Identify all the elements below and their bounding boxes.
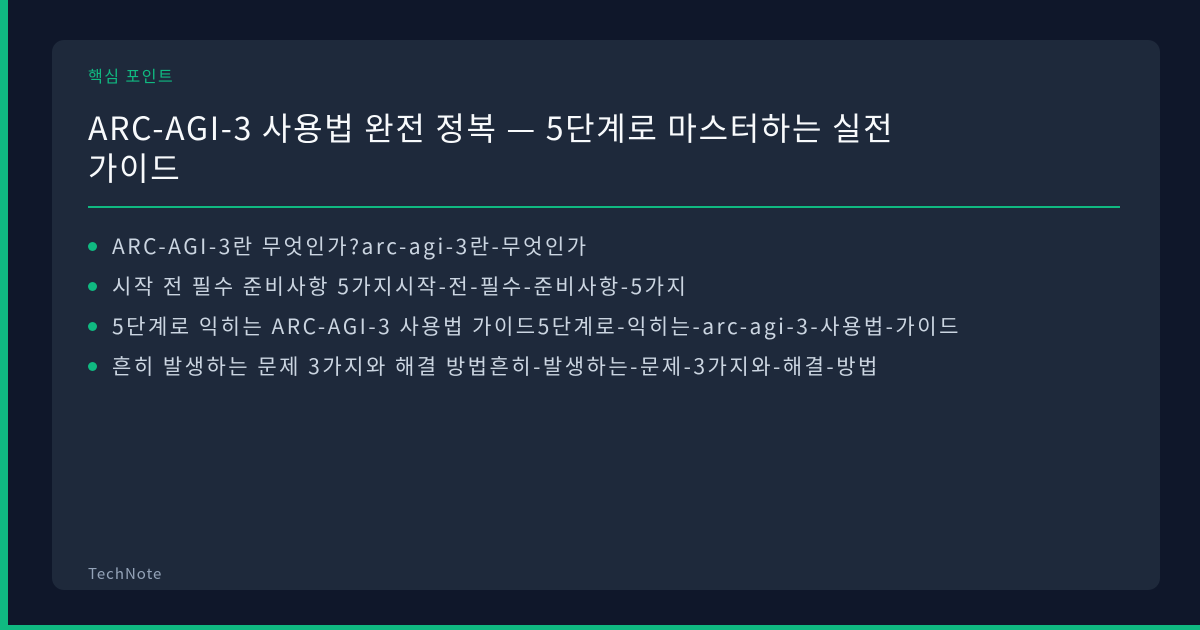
label: key points: 핵심 포인트 bbox=[88, 63, 174, 87]
bullet 1: ARC-AGI-3란 무엇인가?arc-agi-3란-무엇인가 bbox=[112, 231, 589, 261]
bullet 4: 흔히 발생하는 문제 3가지와 해결 방법흔히-발생하는-문제-3가지와-해결-방법 bbox=[112, 351, 880, 381]
bullet 2: 시작 전 필수 준비사항 5가지시작-전-필수-준비사항-5가지 bbox=[112, 271, 688, 301]
footer brand: TechNote bbox=[88, 563, 162, 584]
accent bar left bbox=[0, 0, 8, 630]
bullet list bbox=[88, 231, 961, 381]
accent bar bottom bbox=[0, 625, 1200, 630]
divider bbox=[88, 206, 1120, 208]
title: ARC-AGI-3 사용법 완전 정복 — 5단계로 마스터하는 실전 가이드 bbox=[88, 104, 894, 190]
bullet 3: 5단계로 익히는 ARC-AGI-3 사용법 가이드5단계로-익히는-arc-agi-3-사용법-가이드 bbox=[112, 311, 961, 341]
